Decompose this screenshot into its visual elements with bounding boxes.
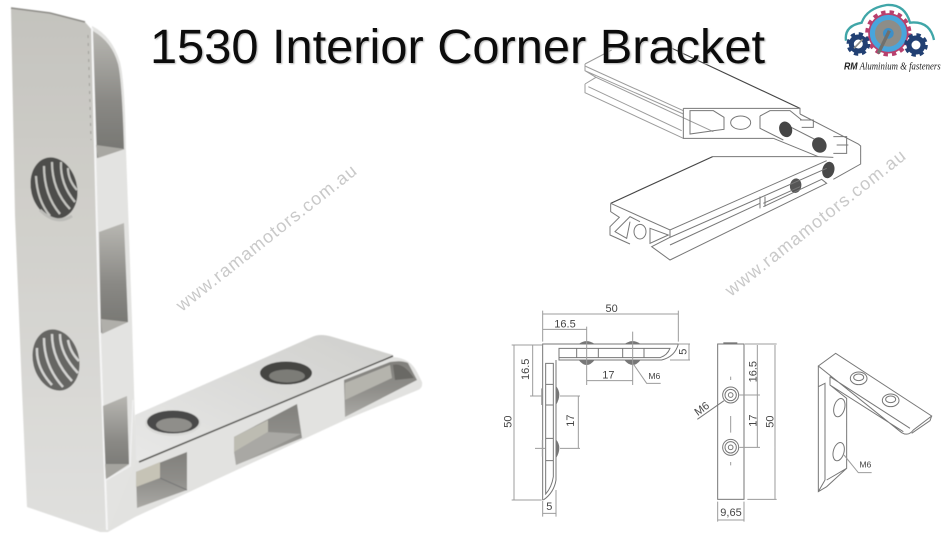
side view dimension labels: 16.5 <box>520 359 532 380</box>
logo cloud outline <box>846 5 934 41</box>
lower profile <box>610 157 833 260</box>
front view dimension labels <box>692 361 776 519</box>
front view dimension labels: 9,65 <box>720 507 742 519</box>
bracket photo <box>11 8 422 532</box>
side view dimension labels: 17 <box>602 369 614 381</box>
watermark left: www.ramamotors.com.au <box>171 160 361 316</box>
lower arm windows <box>136 361 417 508</box>
corner bracket joint <box>773 114 861 194</box>
side view dimension labels: 5 <box>546 501 552 513</box>
side view dimension labels: 50 <box>502 416 514 428</box>
side view dimension labels: 5 <box>678 349 690 355</box>
logo centre gear <box>867 12 909 54</box>
isometric view label: M6 <box>859 459 872 469</box>
side view dimension labels: 17 <box>565 415 577 427</box>
front view dimension labels: 16.5 <box>747 361 759 382</box>
title: 1530 Interior Corner Bracket <box>150 21 765 74</box>
isometric view <box>818 353 932 492</box>
threaded hole, lower arm left <box>145 410 201 436</box>
upper profile <box>585 47 802 140</box>
title shadow: 1530 Interior Corner Bracket <box>151 22 766 75</box>
logo wordmark: RM Aluminium & fasteners <box>844 61 941 72</box>
bracket lower arm <box>105 335 422 532</box>
side view dimension labels: 50 <box>606 303 618 315</box>
side view with dimensions <box>502 303 690 517</box>
logo <box>844 5 941 72</box>
front view dimension labels: 17 <box>747 415 759 427</box>
side view dimension labels <box>502 303 690 513</box>
watermark right: www.ramamotors.com.au <box>720 145 910 301</box>
front view dimension labels: M6 <box>692 400 712 419</box>
front view dimension labels: 50 <box>764 416 776 428</box>
threaded hole, upper <box>24 152 84 224</box>
logo left gear <box>848 34 869 54</box>
dimension drawings <box>502 303 932 522</box>
threaded hole, lower arm right <box>258 361 314 387</box>
side view dimension labels: M6 <box>648 371 661 381</box>
side view dimension labels: 16.5 <box>554 318 576 330</box>
threaded hole, lower <box>26 324 86 396</box>
upper arm windows <box>93 31 133 480</box>
assembly drawing: profiles joined by corner bracket <box>585 47 861 260</box>
bracket vertical arm <box>11 8 136 532</box>
logo right gear <box>906 35 926 55</box>
front view with dimensions <box>692 342 777 522</box>
